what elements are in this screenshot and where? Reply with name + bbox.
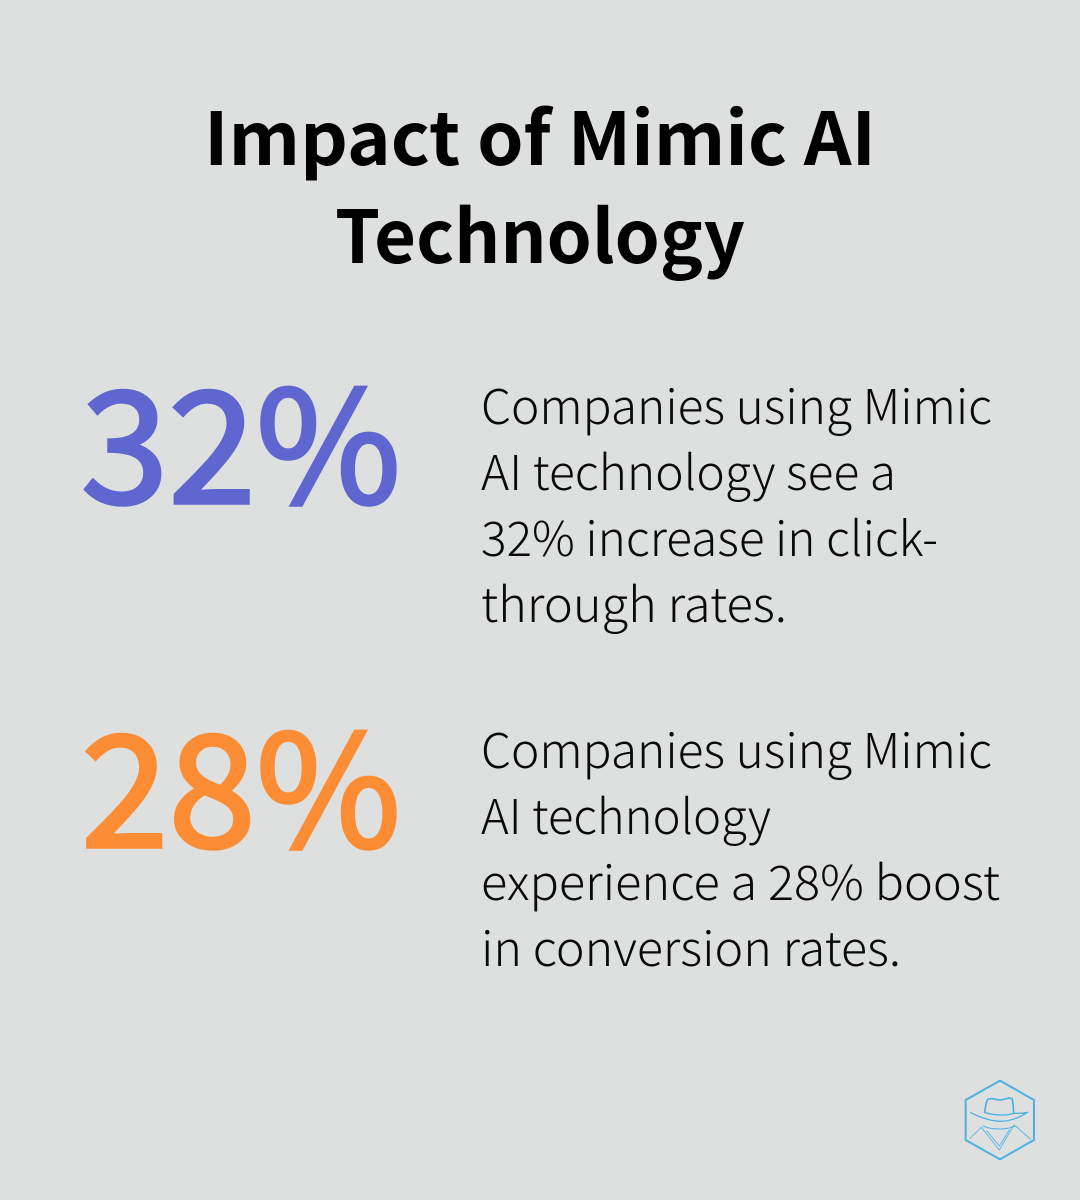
text block: conversion rates: in conversion rates. [481, 910, 901, 980]
text block: conversion rates: Companies using Mimic [481, 712, 992, 782]
stat: 32%: 32% [81, 323, 401, 548]
text block: click-through rates: through rates. [481, 566, 787, 636]
title: Technology [335, 179, 745, 285]
text block: click-through rates: 32% increase in click- [481, 500, 938, 570]
title [204, 81, 876, 285]
text block: conversion rates: experience a 28% boost [481, 844, 1000, 914]
text block: click-through rates: Companies using Mimic [481, 368, 992, 438]
title: Impact of Mimic AI [204, 81, 876, 187]
text block: click-through rates [481, 368, 992, 636]
icon: hexagon spy logo [966, 1081, 1034, 1159]
text block: click-through rates: AI technology see a [481, 434, 896, 504]
text block: conversion rates [481, 712, 1000, 980]
stat: 28%: 28% [81, 667, 401, 892]
text block: conversion rates: AI technology [481, 778, 771, 848]
